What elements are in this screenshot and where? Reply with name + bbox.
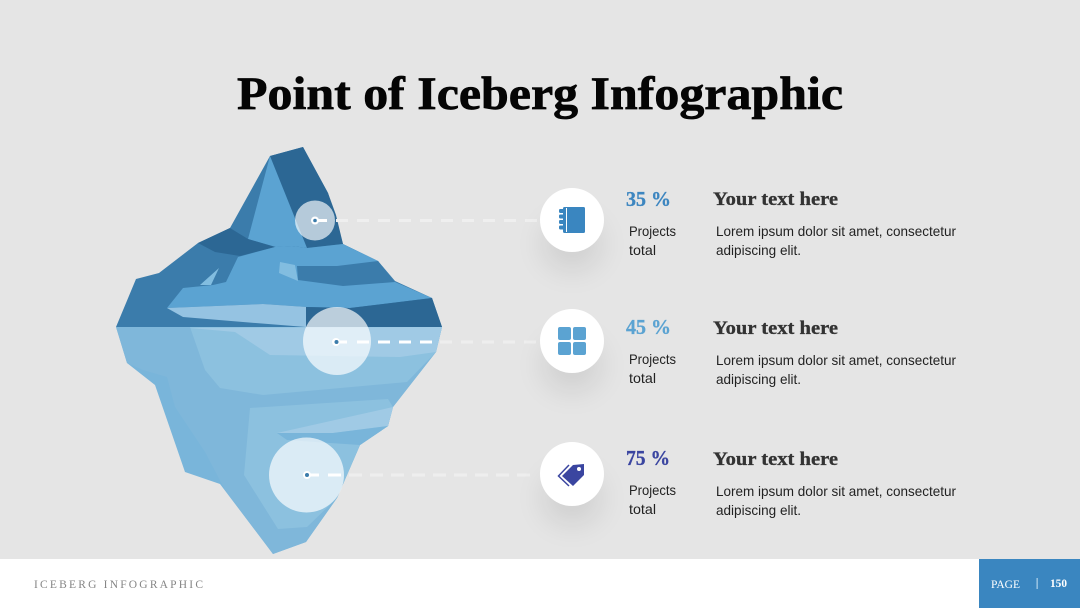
body text: Lorem ipsum dolor sit amet, consectetur	[716, 223, 956, 239]
body text	[716, 352, 956, 387]
body text: adipiscing elit.	[716, 371, 801, 387]
label: total	[629, 501, 656, 517]
body text	[716, 223, 956, 258]
footer label: ICEBERG INFOGRAPHIC	[34, 579, 203, 591]
label	[629, 223, 676, 258]
label	[629, 482, 676, 517]
body text: Lorem ipsum dolor sit amet, consectetur	[716, 352, 956, 368]
connector line: 75 %	[303, 471, 532, 479]
row 1: 35 %	[540, 187, 956, 271]
body text	[716, 483, 956, 518]
page number badge: 150	[1050, 578, 1067, 590]
label: Projects	[629, 351, 676, 367]
connector line: 35 %	[311, 216, 540, 224]
footer bar	[0, 559, 1080, 608]
label	[629, 351, 676, 386]
page number badge	[979, 559, 1080, 608]
body text: Lorem ipsum dolor sit amet, consectetur	[716, 483, 956, 499]
label: total	[629, 370, 656, 386]
iceberg above water	[116, 147, 442, 327]
heading: Your text here	[713, 319, 838, 339]
label: Projects	[629, 482, 676, 498]
row 3: 75 %	[540, 442, 956, 525]
percentage: 35 %	[626, 187, 671, 211]
body text: adipiscing elit.	[716, 502, 801, 518]
label: Projects	[629, 223, 676, 239]
connector line: 45 %	[332, 338, 540, 346]
body text: adipiscing elit.	[716, 242, 801, 258]
iceberg below water	[116, 327, 442, 554]
highlight circles	[269, 200, 371, 512]
heading: Your text here	[713, 450, 838, 470]
icon: notebook	[540, 188, 604, 271]
label: total	[629, 242, 656, 258]
icon: grid	[540, 309, 604, 392]
heading: Your text here	[713, 190, 838, 210]
iceberg illustration	[116, 147, 442, 554]
percentage: 45 %	[626, 315, 671, 339]
percentage: 75 %	[626, 446, 670, 470]
row 2: 45 %	[540, 309, 956, 392]
title: Point of Iceberg Infographic	[237, 68, 843, 120]
page number badge: PAGE	[991, 579, 1020, 591]
icon: price tag	[540, 442, 604, 525]
